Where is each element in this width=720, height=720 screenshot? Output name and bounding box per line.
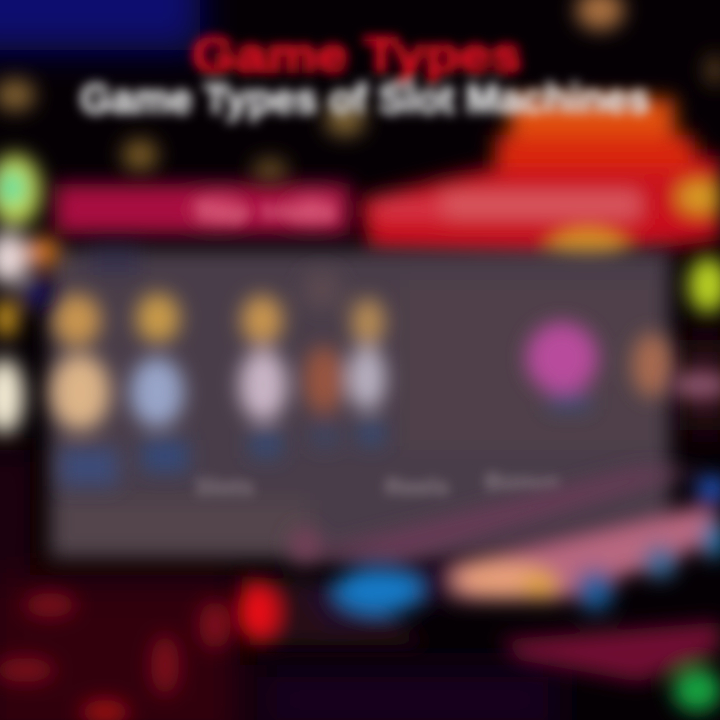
panel labels: Slots xyxy=(195,474,254,501)
title xyxy=(80,27,650,122)
panel labels: Reels xyxy=(385,474,449,501)
side and ambient lights xyxy=(0,0,720,434)
pink icon xyxy=(526,322,598,394)
main panel xyxy=(50,245,670,558)
console keyboard xyxy=(237,468,720,712)
red marquee band xyxy=(358,98,720,270)
banner caption: Top Slots xyxy=(195,199,335,226)
peach icon xyxy=(632,333,672,397)
slot column figures xyxy=(50,270,672,486)
figure 1 xyxy=(50,294,118,486)
figure 5 xyxy=(348,298,386,446)
panel labels: Bonus xyxy=(485,469,560,496)
panel labels xyxy=(195,469,560,501)
bottom-left floor pattern xyxy=(0,593,231,720)
figure 3 xyxy=(239,295,287,458)
figure 2 xyxy=(130,293,188,472)
crimson banner xyxy=(55,184,350,234)
title line 1: Game Types xyxy=(192,27,522,83)
figure 4 xyxy=(302,270,345,447)
title line 2: Game Types of Slot Machines xyxy=(80,75,650,122)
